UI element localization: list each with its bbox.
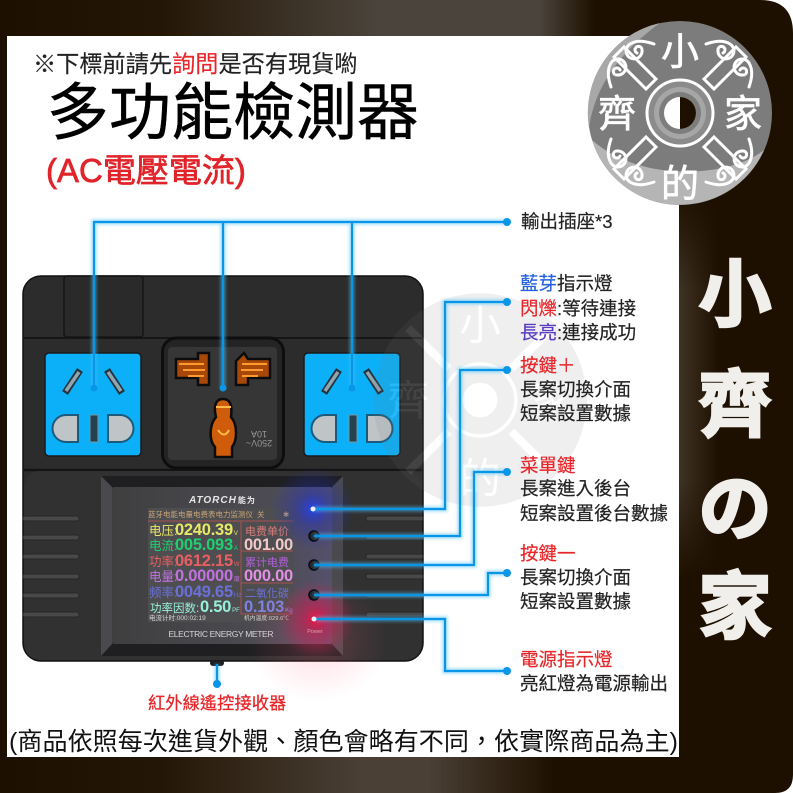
total cost value: 000.00 [244, 567, 293, 585]
total cost label: 累计电费 [245, 556, 289, 569]
logo character: home: 家 [724, 94, 762, 136]
frequency reading: Hz [234, 593, 241, 599]
callout lines [94, 222, 507, 684]
voltage reading: V [234, 531, 238, 537]
left blue socket [45, 353, 141, 456]
side brand text [698, 255, 772, 648]
lcd header: ✱ [283, 510, 290, 519]
co2 value: 0.103Kg [244, 598, 293, 616]
line glow [94, 222, 507, 684]
watermark logo: 家 [531, 377, 573, 424]
label: minus key: 長案切換介面 [520, 567, 631, 588]
title: 多功能檢測器 [47, 79, 419, 148]
spokes [614, 47, 746, 179]
power factor reading: 0.50 [200, 598, 231, 616]
label: bluetooth indicator: 閃爍:等待連接 [520, 298, 636, 319]
brand: ATORCH能为 [188, 495, 256, 506]
label: bluetooth indicator: 長亮:連接成功 [520, 322, 636, 343]
energy reading: 度 [234, 575, 240, 583]
notice line: ※下標前請先詢問是否有現貨喲 [33, 51, 358, 77]
watermark logo: 的 [459, 455, 501, 502]
power reading: 0612.15 [175, 552, 233, 570]
frequency reading: 0049.65 [175, 583, 233, 601]
red glow [278, 581, 354, 657]
label: menu key: 菜單鍵 [520, 455, 576, 476]
vents: left [23, 516, 79, 617]
current reading: A [234, 546, 238, 552]
label: power indicator: 電源指示燈 [520, 649, 613, 670]
scroll ornaments [608, 41, 752, 185]
timer: 电流计时:000:02:19 [149, 613, 206, 622]
price label: 电费单价 [245, 525, 289, 538]
right blue socket [304, 353, 400, 456]
logo badge [588, 21, 772, 206]
price value: 001.00 [244, 536, 293, 554]
device body [23, 276, 423, 661]
label: menu key: 長案進入後台 [520, 478, 631, 499]
hub [647, 80, 713, 146]
power label: Power [307, 629, 323, 635]
current reading: 005.093 [175, 536, 233, 554]
side brand text: 家 [698, 567, 772, 648]
line core [94, 222, 507, 684]
energy reading: 0.00000 [175, 567, 233, 585]
meter bezel [101, 476, 343, 656]
side brand text: 齊 [698, 365, 772, 446]
socket rating text: 10A [251, 429, 267, 439]
meter caption: ELECTRIC ENERGY METER [168, 629, 274, 639]
blue glow [271, 467, 355, 551]
side brand text: 小 [698, 255, 772, 336]
disclaimer: (商品依照每次進貨外觀、顏色會略有不同，依實際商品為主) [9, 728, 678, 756]
vents: right [366, 516, 423, 617]
logo character: small: 小 [661, 32, 699, 74]
power factor reading: PF [232, 608, 240, 614]
watermark logo: 小 [459, 302, 501, 349]
energy reading: 电量: [149, 570, 177, 584]
frequency reading: 频率: [149, 585, 177, 600]
callout dots [90, 218, 511, 688]
meter bevel corners [101, 476, 343, 656]
lcd header: 关 [257, 509, 265, 519]
label: bluetooth indicator: 藍芽指示燈 [520, 273, 613, 294]
label: power indicator: 亮紅燈為電源輸出 [520, 673, 668, 694]
logo character: qi: 齊 [598, 94, 636, 136]
lcd display [148, 508, 294, 622]
label: minus key: 按鍵一 [520, 543, 576, 564]
power reading: W [234, 562, 240, 568]
pink halo below device [248, 578, 388, 702]
lcd header: 蓝牙电能电量电费表电力监测仪 [148, 510, 253, 519]
watermark logo [373, 293, 587, 507]
subtitle: (AC電壓電流) [46, 152, 246, 189]
temperature: 机内温度:029.6℃ [244, 614, 289, 622]
label: minus key: 短案設置數據 [520, 591, 631, 612]
infrared receiver tab [210, 660, 224, 666]
watermark logo: 齊 [387, 377, 429, 424]
label: infrared receiver: 紅外線遙控接收器 [148, 693, 286, 713]
label: output sockets: 輸出插座*3 [521, 211, 612, 232]
white content panel [7, 36, 679, 757]
meter faceplate [112, 487, 332, 644]
current reading: 电流: [149, 539, 177, 553]
voltage reading: 0240.39 [175, 521, 233, 539]
logo character: of: 的 [661, 164, 699, 206]
power reading: 功率: [149, 554, 177, 569]
power factor reading: 功率因数: [150, 601, 199, 615]
voltage reading: 电压: [149, 524, 177, 538]
meter buttons [309, 531, 319, 600]
universal centre socket [162, 338, 284, 468]
led: bluetooth and power [310, 506, 316, 622]
label: plus key: 長案切換介面 [520, 379, 631, 400]
label: plus key: 短案設置數據 [520, 403, 631, 424]
socket rating text: 250V~ [246, 438, 272, 448]
co2 label: 二氧化碳 [245, 586, 289, 600]
label: plus key: 按鍵＋ [520, 355, 576, 376]
side brand text: の [698, 469, 772, 550]
label: menu key: 短案設置後台數據 [520, 503, 668, 524]
